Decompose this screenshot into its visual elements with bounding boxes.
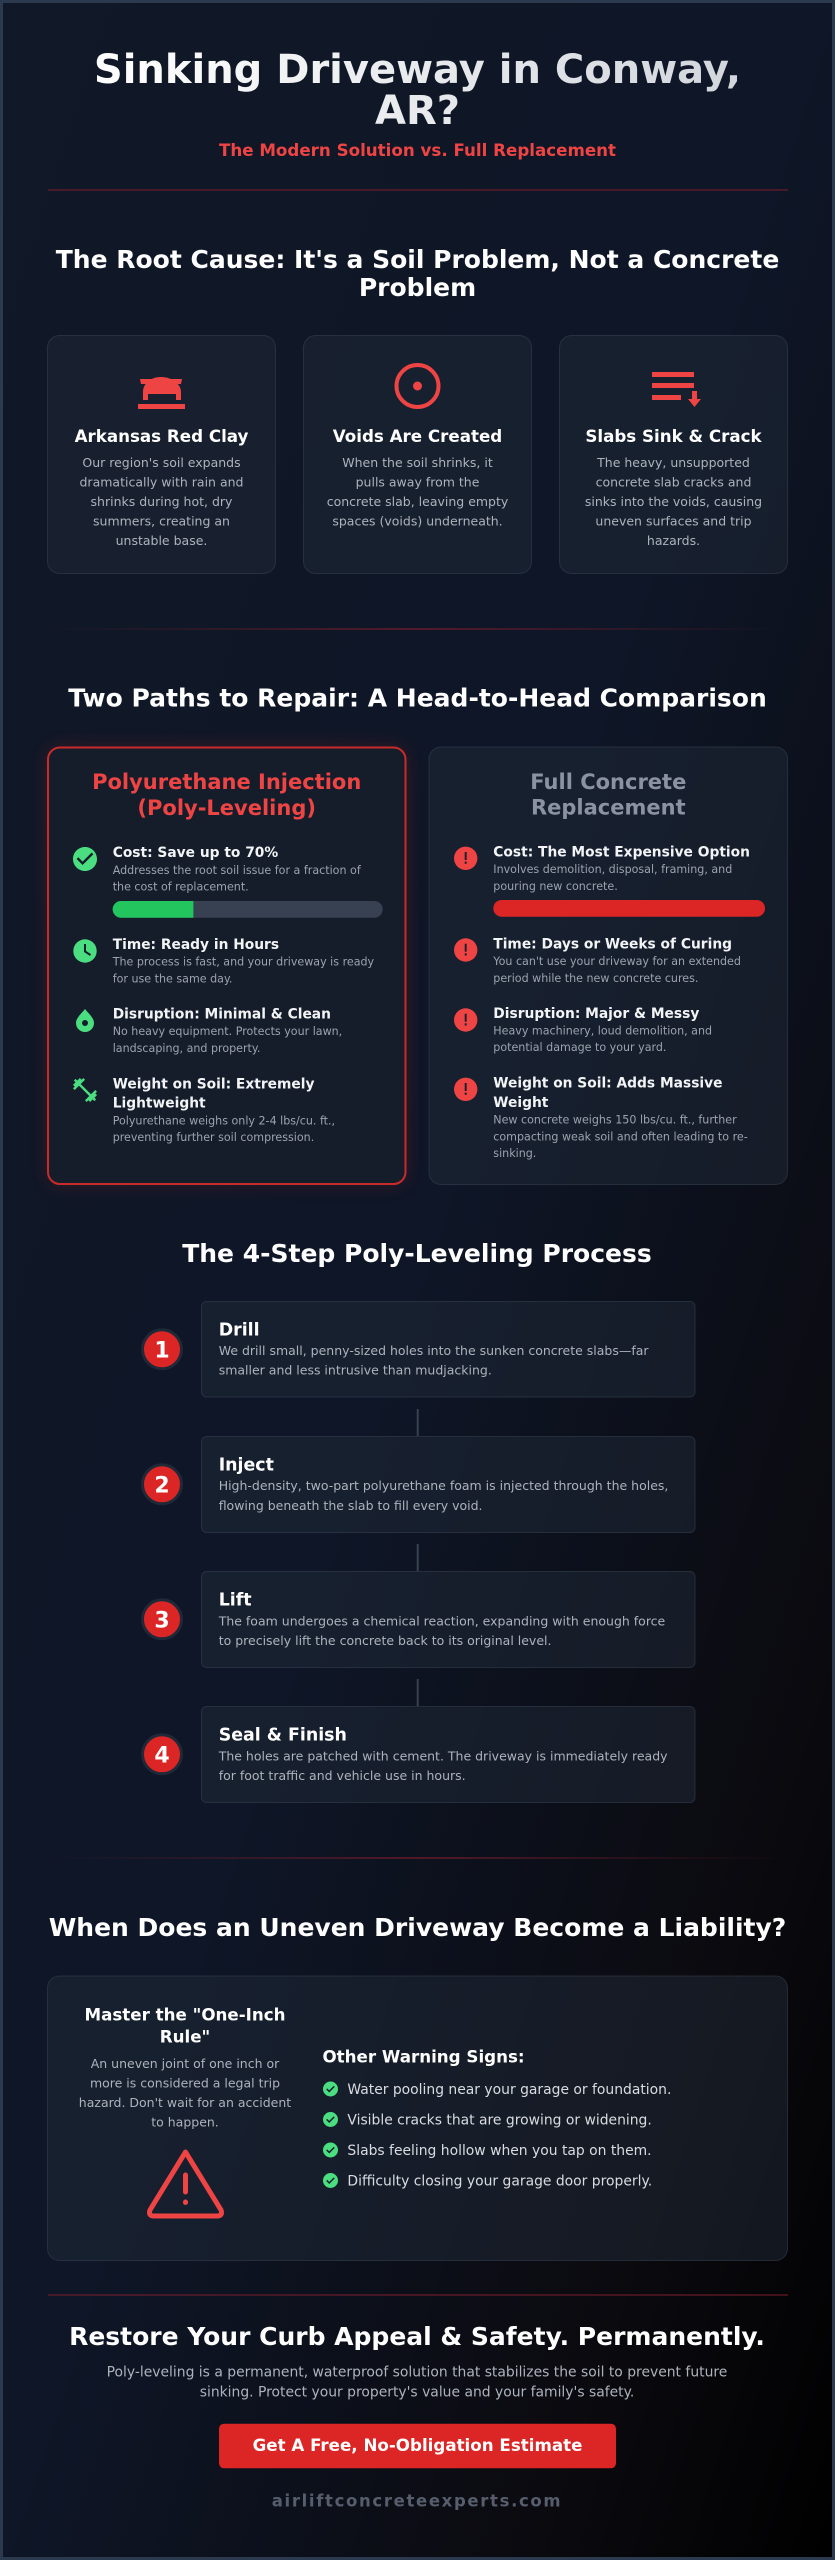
one-inch rule: Master the "One-Inch: [85, 2005, 285, 2025]
title: Sinking Driveway in Conway,: [94, 47, 741, 93]
card text: dramatically with rain and: [80, 474, 243, 490]
row: cost: Addresses the root soil issue for a fraction of: [113, 864, 362, 877]
icon: alert: [454, 938, 477, 962]
heading: process: The 4-Step Poly-Leveling Process: [182, 1239, 652, 1268]
call to action text: [107, 2365, 727, 2400]
button: [219, 2424, 616, 2468]
card text: summers, creating an: [93, 514, 230, 528]
step 3: lift: Lift: [219, 1591, 252, 1611]
row: weight: New concrete weighs 150 lbs/cu. ft., further: [493, 1114, 737, 1127]
card text: [327, 455, 509, 528]
row: time: for use the same day.: [113, 972, 232, 985]
row: time: Time: Ready in Hours: [113, 937, 279, 953]
icon: alert: [454, 1078, 477, 1101]
row: weight: Weight on Soil: Extremely: [113, 1076, 314, 1092]
card text: spaces (voids) underneath.: [332, 514, 503, 528]
card text: pulls away from the: [356, 474, 480, 490]
panel: full concrete replacement: [429, 747, 788, 1184]
heading: root cause: The Root Cause: It's a Soil Problem, Not a Concrete: [56, 245, 779, 274]
row: cost: Cost: The Most Expensive Option: [493, 845, 750, 861]
card heading: Slabs Sink & Crack: [585, 426, 763, 446]
row: time: The process is fast, and your driveway is ready: [112, 956, 375, 969]
sign 1: Water pooling near your garage or foundation.: [347, 2082, 671, 2098]
card text: [80, 455, 243, 548]
cost bar: [493, 900, 765, 917]
row: time: You can't use your driveway for an extended: [492, 955, 741, 968]
row: cost: the cost of replacement.: [113, 881, 249, 894]
call to action heading: Restore Your Curb Appeal & Safety. Permanently.: [69, 2322, 765, 2351]
step number: 4: [154, 1743, 170, 1768]
row: weight: compacting weak soil and often leading to re-: [493, 1130, 748, 1143]
panel: Voids Are Created: [304, 336, 532, 574]
row: weight: sinking.: [493, 1147, 536, 1160]
row: time: Time: Days or Weeks of Curing: [493, 936, 732, 952]
website: airliftconcreteexperts.com: [272, 2492, 562, 2511]
one-inch rule: Rule": [160, 2026, 210, 2046]
row: cost: Cost: Save up to 70%: [113, 845, 278, 861]
step number: 2: [154, 1473, 170, 1498]
card text: [585, 455, 762, 548]
step 4: seal and finish: The holes are patched with cement. The driveway is immediately ready: [218, 1749, 668, 1764]
panel heading: Replacement: [531, 795, 686, 819]
card heading: Arkansas Red Clay: [75, 426, 249, 446]
panel: polyurethane injection: [48, 747, 406, 1184]
card text: The heavy, unsupported: [596, 455, 750, 470]
step number: [142, 1735, 182, 1774]
row: cost: [454, 845, 765, 917]
title: [94, 47, 741, 134]
heading: liability: When Does an Uneven Driveway Become a Liability?: [49, 1913, 786, 1942]
step number: [142, 1330, 182, 1369]
icon: alert: [454, 847, 477, 870]
panel: liability: [48, 1976, 788, 2260]
icon: car on slab: [138, 377, 185, 409]
step 1: drill: smaller and less intrusive than mudjacking.: [219, 1363, 492, 1378]
row: time: [73, 937, 375, 985]
step 4: seal and finish: Seal & Finish: [219, 1726, 347, 1746]
step 3: lift: The foam undergoes a chemical reaction, expanding with enough force: [218, 1614, 666, 1629]
step number: 1: [154, 1338, 170, 1363]
call to action text: sinking. Protect your property's value and your family's safety.: [200, 2384, 634, 2400]
step 2: inject: [142, 1436, 695, 1532]
sign 3: Slabs feeling hollow when you tap on them.: [347, 2143, 652, 2159]
sign 4: Difficulty closing your garage door properly.: [347, 2174, 652, 2190]
panel: Arkansas Red Clay: [48, 336, 276, 574]
row: time: [454, 936, 741, 985]
step 3: lift: [142, 1572, 695, 1668]
card text: concrete slab, leaving empty: [327, 494, 509, 509]
step 2: inject: High-density, two-part polyurethane foam is injected through the holes,: [219, 1478, 668, 1493]
step 4: seal and finish: [142, 1706, 695, 1802]
row: disruption: [76, 1007, 342, 1055]
row: disruption: potential damage to your yard.: [493, 1041, 666, 1054]
card text: hazards.: [647, 533, 700, 548]
panel heading: [92, 770, 361, 820]
row: weight: Polyurethane weighs only 2-4 lbs/cu. ft.,: [113, 1114, 335, 1127]
icon: clock: [73, 939, 97, 963]
step 2: inject: Inject: [219, 1456, 274, 1476]
title: AR?: [375, 88, 460, 134]
card text: Our region's soil expands: [82, 455, 241, 470]
step 3: lift: to precisely lift the concrete back to its original level.: [219, 1633, 551, 1648]
icon: drop: [76, 1009, 94, 1032]
card text: uneven surfaces and trip: [595, 514, 752, 528]
call to action text: Poly-leveling is a permanent, waterproof solution that stabilizes the soil to prevent future: [107, 2365, 727, 2381]
row: weight: Weight: [493, 1095, 549, 1111]
row: weight: Lightweight: [113, 1096, 206, 1112]
row: disruption: Heavy machinery, loud demolition, and: [493, 1024, 712, 1037]
row: disruption: Disruption: Minimal & Clean: [113, 1007, 331, 1023]
card text: concrete slab cracks and: [596, 474, 751, 490]
row: weight: [73, 1076, 335, 1144]
step 1: drill: [142, 1302, 695, 1397]
panel heading: (Poly-Leveling): [137, 796, 316, 820]
row: disruption: [454, 1006, 712, 1054]
step 4: seal and finish: for foot traffic and vehicle use in hours.: [219, 1768, 466, 1783]
card text: unstable base.: [116, 533, 207, 548]
row: disruption: landscaping, and property.: [113, 1042, 260, 1055]
heading: comparison: Two Paths to Repair: A Head-to-Head Comparison: [68, 684, 767, 713]
one-inch rule: to happen.: [151, 2115, 219, 2130]
row: cost: [73, 845, 383, 918]
row: weight: Weight on Soil: Adds Massive: [493, 1076, 723, 1092]
subtitle: The Modern Solution vs. Full Replacement: [219, 140, 616, 160]
step 1: drill: Drill: [219, 1321, 260, 1341]
panel heading: [530, 770, 686, 819]
card text: sinks into the voids, causing: [585, 494, 762, 509]
icon: void circle: [396, 365, 438, 407]
step 1: drill: We drill small, penny-sized holes into the sunken concrete slabs—far: [219, 1343, 649, 1358]
card text: shrinks during hot, dry: [91, 494, 233, 509]
icon: sinking layers: [652, 372, 701, 407]
panel heading: Polyurethane Injection: [92, 770, 361, 794]
step number: [142, 1600, 182, 1639]
row: disruption: No heavy equipment. Protects your lawn,: [113, 1025, 342, 1038]
step number: 3: [154, 1608, 170, 1633]
row: cost: Involves demolition, disposal, framing, and: [493, 863, 732, 876]
warning signs: Other Warning Signs:: [322, 2047, 525, 2067]
one-inch rule: hazard. Don't wait for an accident: [79, 2095, 291, 2110]
one-inch rule: more is considered a legal trip: [90, 2076, 280, 2091]
row: weight: preventing further soil compression.: [113, 1131, 314, 1144]
row: weight: [454, 1076, 748, 1160]
step 2: inject: flowing beneath the slab to fill every void.: [219, 1498, 483, 1513]
row: cost: pouring new concrete.: [493, 880, 618, 893]
row: time: period while the new concrete cures.: [493, 972, 698, 985]
sign 2: Visible cracks that are growing or widening.: [347, 2113, 652, 2129]
cost bar: [113, 901, 383, 918]
button: Get A Free, No-Obligation Estimate: [253, 2435, 582, 2455]
icon: alert: [454, 1008, 477, 1032]
warning signs: [322, 2047, 671, 2190]
heading: root cause: [56, 245, 779, 302]
card heading: Voids Are Created: [333, 426, 502, 446]
step number: [142, 1465, 182, 1504]
heading: root cause: Problem: [359, 273, 476, 302]
panel heading: Full Concrete: [530, 770, 686, 794]
icon: dumbbell: [73, 1078, 97, 1102]
icon: check: [73, 847, 97, 871]
panel: Slabs Sink & Crack: [560, 336, 788, 574]
row: disruption: Disruption: Major & Messy: [493, 1006, 699, 1022]
icon: warning triangle: [150, 2152, 222, 2216]
one-inch rule: An uneven joint of one inch or: [91, 2056, 280, 2071]
one-inch rule: [79, 2005, 291, 2130]
card text: When the soil shrinks, it: [342, 455, 493, 470]
